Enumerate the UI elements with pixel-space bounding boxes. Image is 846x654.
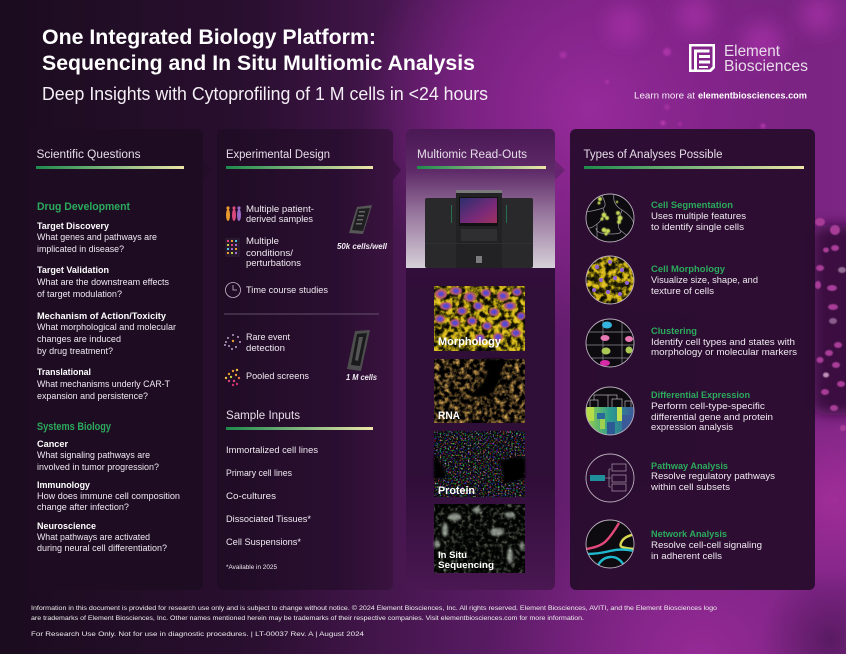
image: in situ sequencing: In Situ (438, 550, 467, 561)
link: learn more: elementbiosciences.com (698, 90, 807, 102)
footer disclaimer: Information in this document is provided for research use only and is subject to change without notice. © 2024 Element Biosciences, Inc. All rights reserved. Element Biosciences, AVITI, and the Element Biosciences logo (31, 605, 718, 612)
label: 1M cells: 1 M cells (346, 373, 378, 382)
section: drug development: by drug treatment? (37, 346, 113, 356)
footer disclaimer: For Research Use Only. Not for use in diagnostic procedures. | LT-00037 Rev. A | August 2024 (31, 631, 364, 638)
section: systems biology: Immunology (37, 480, 90, 490)
text: pathway analysis: within cell subsets (650, 482, 731, 492)
section: systems biology: What pathways are activated (37, 532, 150, 542)
footer disclaimer (31, 605, 718, 638)
text: differential expression: Differential Expression (651, 390, 750, 400)
list: sample inputs (226, 445, 319, 571)
list: sample inputs: Primary cell lines (226, 468, 292, 478)
instrument illustration (425, 190, 533, 268)
image: in situ sequencing (434, 504, 525, 573)
text: differential expression: Perform cell-type-specific (651, 401, 766, 411)
section: systems biology: Neuroscience (37, 521, 96, 531)
text: rare event (246, 332, 290, 353)
footer disclaimer: are trademarks of Element Biosciences, Inc. Other names mentioned herein may be trademarks of their respective companies. Visit elementbiosciences.com for more information. (31, 615, 584, 622)
text: conditions: conditions/ (246, 248, 294, 258)
icon: flow cell 1M (347, 330, 370, 371)
text: conditions (246, 236, 302, 268)
section: systems biology: How does immune cell composition (37, 491, 180, 501)
panel: experimental design (217, 129, 401, 590)
list: sample inputs: Co-cultures (226, 491, 277, 501)
title: One Integrated Biology Platform: (42, 26, 376, 49)
image: in situ sequencing: Sequencing (438, 560, 494, 571)
section: systems biology: Systems Biology (37, 421, 112, 433)
logo: element biosciences: Biosciences (724, 58, 808, 75)
icon: cartridge 50k (349, 205, 372, 234)
section: drug development: Target Discovery (37, 221, 109, 231)
section: systems biology: Cancer (37, 439, 69, 449)
icon: pathway analysis (586, 454, 634, 502)
logo: element biosciences (689, 43, 808, 75)
text: patient samples: derived samples (246, 214, 314, 224)
section: drug development: Target Validation (37, 265, 109, 275)
text: cell morphology: texture of cells (651, 286, 715, 296)
dark patch right margin (812, 225, 846, 415)
icon: clock (226, 282, 240, 298)
panel: multiomic read-outs (406, 129, 565, 590)
gradient bar (584, 166, 804, 169)
image: protein: Protein (438, 485, 475, 497)
text: patient samples (246, 204, 314, 224)
section: systems biology: What signaling pathways are (37, 450, 150, 460)
icon: condition grid (225, 238, 240, 257)
list: sample inputs: Cell Suspensions* (226, 537, 302, 547)
section: systems biology: during neural cell differentiation? (37, 543, 167, 553)
text: network analysis (651, 529, 762, 561)
text: network analysis: Network Analysis (651, 529, 727, 539)
heading: Scientific Questions (36, 149, 141, 161)
text: cell segmentation: Uses multiple features (651, 211, 747, 221)
icon: patients (226, 206, 241, 221)
section: drug development: What are the downstream effects (37, 277, 169, 287)
text: rare event: Rare event (246, 332, 290, 342)
section: drug development (37, 201, 176, 401)
text: network analysis: in adherent cells (651, 551, 723, 561)
dots right margin (815, 218, 846, 431)
link: learn more (634, 90, 807, 102)
section: drug development: Translational (37, 367, 91, 377)
image: morphology: Morphology (438, 336, 502, 348)
heading: Types of Analyses Possible (584, 149, 722, 161)
text: clustering (651, 326, 798, 357)
gradient bar (36, 166, 184, 169)
text: pathway analysis: Resolve regulatory pathways (651, 471, 776, 481)
icon: network analysis (586, 520, 636, 570)
text: cell morphology: Cell Morphology (651, 264, 725, 274)
text: differential expression: expression analysis (651, 422, 734, 432)
text: clustering: Clustering (651, 326, 697, 336)
image: RNA: RNA (438, 410, 460, 422)
text: cell segmentation: Cell Segmentation (651, 200, 733, 210)
section: drug development: of target modulation? (37, 289, 122, 299)
image: morphology (434, 286, 525, 351)
subtitle: Deep Insights with Cytoprofiling of 1 M cells in <24 hours (42, 84, 488, 104)
panel: types of analyses (570, 129, 815, 590)
text: conditions: Multiple (246, 236, 279, 246)
section: drug development: Mechanism of Action/Toxicity (37, 311, 166, 321)
icon: cell morphology (586, 256, 634, 304)
section: drug development: Drug Development (37, 201, 130, 213)
text: conditions: perturbations (246, 258, 302, 268)
panel: scientific questions (27, 129, 211, 590)
gradient bar (417, 166, 546, 169)
text: cell segmentation: to identify single cells (651, 222, 745, 232)
image: RNA (434, 359, 525, 423)
icon: clustering (586, 319, 634, 367)
text: differential expression: differential gene and protein (651, 412, 773, 422)
heading: Experimental Design (226, 149, 330, 161)
text: rare event: detection (246, 343, 285, 353)
heading: Multiomic Read-Outs (417, 149, 527, 161)
text: cell segmentation (651, 200, 747, 232)
section: systems biology (37, 421, 180, 553)
icon: cell segmentation (586, 194, 634, 244)
image: protein (434, 431, 525, 497)
logo: element biosciences: Element (724, 43, 781, 60)
section: drug development: What mechanisms underly CAR-T (37, 379, 170, 389)
text: differential expression (651, 390, 773, 432)
title (42, 26, 475, 75)
text: network analysis: Resolve cell-cell signaling (651, 540, 762, 550)
list: sample inputs: *Available in 2025 (226, 565, 278, 571)
section: drug development: What morphological and molecular (37, 322, 176, 332)
icon: pooled screens (225, 369, 240, 386)
text: pathway analysis: Pathway Analysis (651, 461, 728, 471)
section: drug development: expansion and persistence? (37, 391, 148, 401)
title: Sequencing and In Situ Multiomic Analysis (42, 52, 475, 75)
list: sample inputs: Immortalized cell lines (226, 445, 319, 455)
text: clustering: Identify cell types and states with (651, 337, 795, 347)
text: pooled screens: Pooled screens (246, 371, 309, 381)
section: systems biology: change after infection? (37, 502, 129, 512)
icon: rare event (224, 334, 241, 350)
icon: differential expression (586, 387, 634, 435)
section: systems biology: involved in tumor progression? (37, 462, 159, 472)
text: clustering: morphology or molecular markers (651, 347, 798, 357)
text: cell morphology: Visualize size, shape, and (651, 275, 758, 285)
link: learn more: Learn more at (634, 90, 695, 102)
section: drug development: What genes and pathways are (37, 232, 157, 242)
gradient bar (226, 427, 373, 430)
label: 50k cells per well: 50k cells/well (337, 242, 388, 251)
section: drug development: changes are induced (37, 334, 121, 344)
section: drug development: implicated in disease? (37, 244, 124, 254)
text: time course: Time course studies (246, 285, 329, 295)
text: cell morphology (651, 264, 758, 296)
sub-heading: sample inputs: Sample Inputs (226, 410, 300, 422)
text: pathway analysis (650, 461, 776, 492)
text: patient samples: Multiple patient- (246, 204, 314, 214)
list: sample inputs: Dissociated Tissues* (226, 514, 311, 524)
gradient bar (226, 166, 373, 169)
